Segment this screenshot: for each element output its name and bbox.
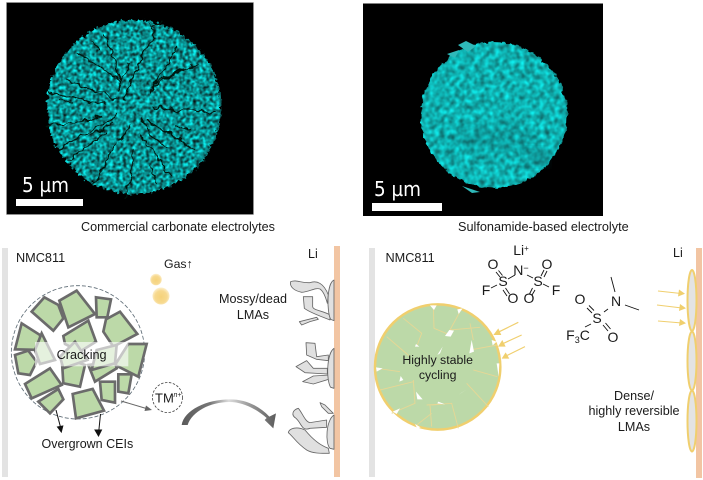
chemical structure: LiFSI: O — [524, 290, 535, 306]
chemical structure: LiFSI: F — [552, 282, 560, 298]
label: Li: Li — [308, 247, 318, 261]
chemical structure: LiFSI: Li — [513, 242, 524, 258]
label: Li: Li — [673, 246, 683, 260]
chemical structure: sulfonamide solvent: O — [575, 291, 586, 307]
chemical structure: LiFSI: S — [498, 273, 508, 289]
panel: sulfonamide cell schematic — [369, 242, 702, 478]
label: mossy/dead LMAs: Mossy/dead — [219, 292, 287, 306]
chemical structure: sulfonamide solvent: N — [611, 293, 621, 309]
cracked NMC particle — [11, 286, 147, 419]
dense particle — [421, 41, 567, 193]
label: mossy/dead LMAs — [219, 292, 287, 322]
cracked particle — [46, 20, 221, 198]
arrows to CEIs — [56, 410, 102, 436]
label: cracking: Cracking — [57, 348, 107, 362]
chemical structure: LiFSI: + — [524, 244, 529, 253]
panel: carbonate electrolyte micrograph — [6, 2, 254, 214]
chemical structure: sulfonamide solvent: C — [580, 327, 590, 343]
protected NMC particle — [375, 304, 500, 430]
dense lithium lobes — [688, 270, 696, 452]
label: dense/highly reversible LMAs: Dense/ — [614, 389, 654, 403]
chemical structure: LiFSI: − — [523, 263, 529, 273]
scale label: 5 µm — [22, 173, 69, 197]
scale bar — [16, 199, 83, 206]
arrow to TM ion — [121, 401, 152, 411]
caption: commercial carbonate electrolytes: Commercial carbonate electrolytes — [81, 220, 275, 234]
label: highly stable cycling — [402, 353, 473, 382]
gold arrows to particle — [493, 322, 525, 359]
chemical structure: LiFSI: O — [508, 290, 519, 306]
cathode current collector — [2, 248, 8, 477]
scale label: 5 µm — [374, 177, 421, 201]
panel: carbonate cell schematic — [2, 246, 340, 477]
label: overgrown CEIs: Overgrown CEIs — [42, 437, 133, 451]
chemical structure: LiFSI: O — [488, 256, 499, 272]
chemical structure: LiFSI: N — [513, 262, 523, 278]
lithium anode — [334, 246, 340, 477]
icon: TM ion — [152, 382, 182, 412]
gold arrows to anode — [657, 290, 686, 326]
panel: sulfonamide electrolyte micrograph — [363, 4, 603, 216]
chemical structure: LiFSI: O — [542, 256, 553, 272]
chemical structure: sulfonamide solvent: O — [608, 329, 619, 345]
chemical structure: LiFSI — [482, 242, 560, 306]
chemical structure: sulfonamide solvent: F — [566, 327, 575, 343]
label: dense/highly reversible LMAs: LMAs — [618, 420, 650, 434]
label: mossy/dead LMAs: LMAs — [237, 308, 269, 322]
chemical structure: LiFSI: S — [533, 273, 543, 289]
label: gas: Gas↑ — [164, 257, 193, 271]
label: dense/highly reversible LMAs: highly reversible — [588, 404, 680, 418]
label: NMC811: NMC811 — [16, 251, 65, 265]
icon: TM ion: n+ — [174, 392, 181, 399]
label: dense/highly reversible LMAs — [588, 389, 680, 434]
icon: gas bubbles — [150, 274, 170, 304]
label: NMC811: NMC811 — [386, 251, 435, 265]
chemical structure: sulfonamide solvent — [566, 277, 639, 345]
chemical structure: LiFSI: F — [482, 282, 490, 298]
mossy lithium deposits — [288, 280, 334, 453]
caption: sulfonamide-based electrolyte: Sulfonamide-based electrolyte — [458, 220, 629, 234]
curved migration arrow — [182, 399, 276, 428]
chemical structure: sulfonamide solvent: 3 — [575, 335, 580, 345]
chemical structure: sulfonamide solvent: S — [592, 310, 602, 326]
scale bar — [372, 203, 442, 211]
lithium anode — [696, 248, 702, 478]
icon: TM ion: TM — [155, 390, 174, 406]
label: highly stable cycling: cycling — [419, 368, 457, 382]
cathode current collector — [369, 248, 375, 477]
label: highly stable cycling: Highly stable — [402, 353, 473, 367]
